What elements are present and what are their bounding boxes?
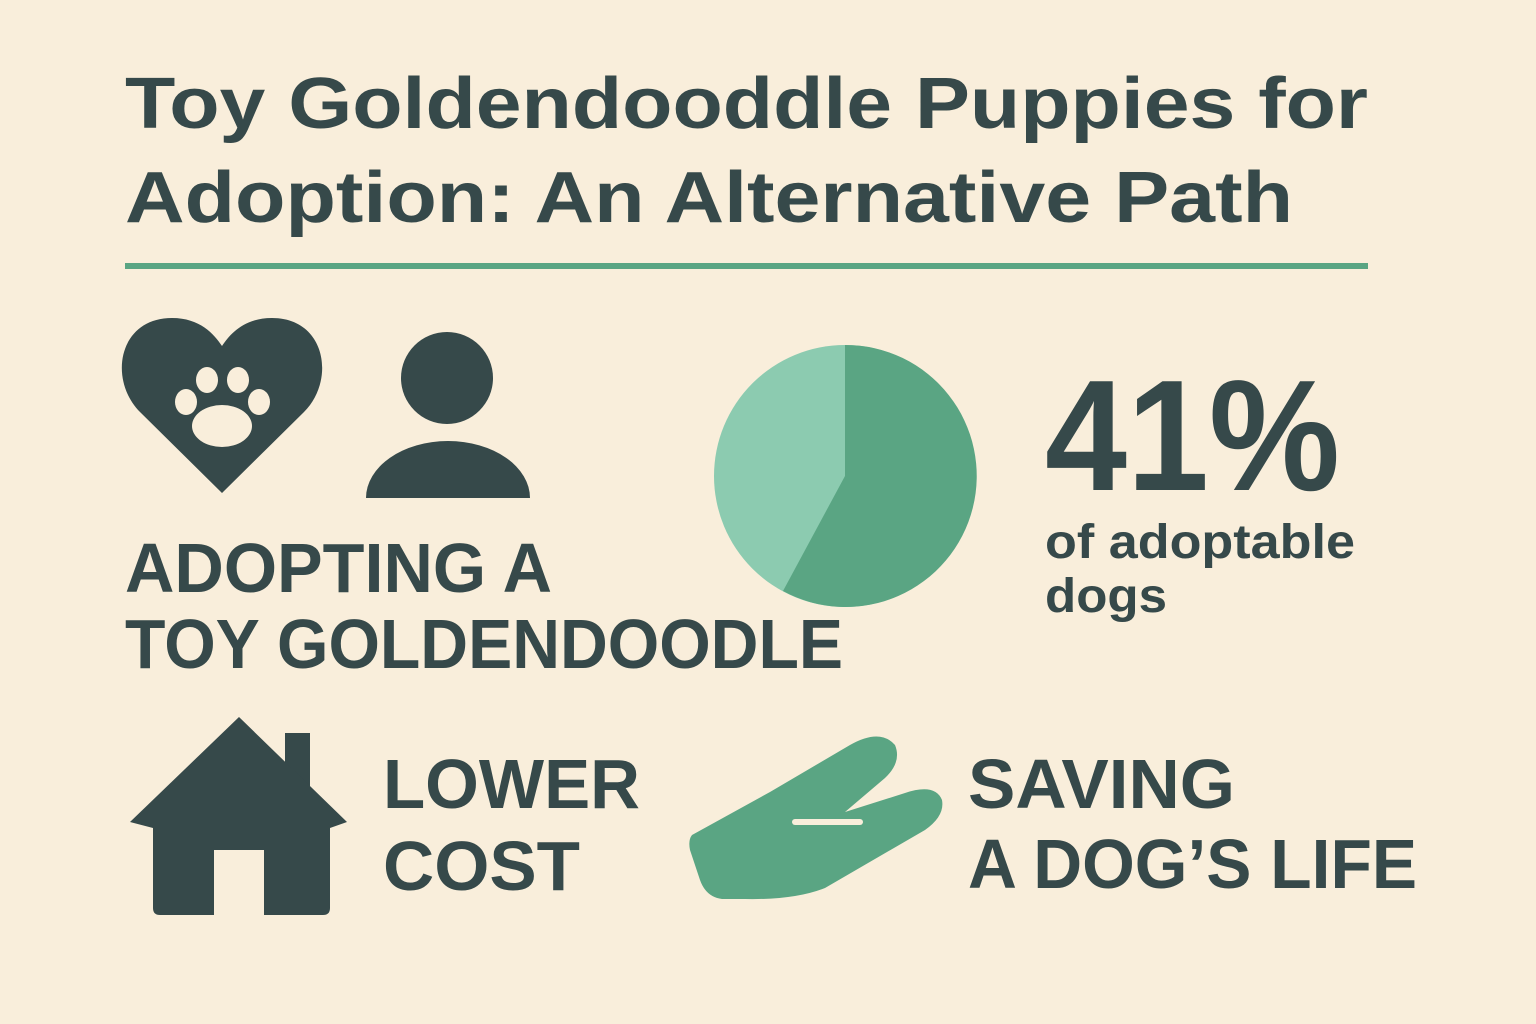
text: lower cost: LOWER (383, 745, 640, 823)
icon: heart with paw (122, 318, 322, 493)
icon: house (130, 717, 347, 915)
text: saving a dog's life: SAVING (968, 745, 1235, 823)
icon: person (366, 332, 530, 498)
heading: adopting (125, 529, 843, 683)
title: Toy Goldendooddle Puppies for (125, 64, 1368, 144)
icon: hand (689, 736, 942, 899)
heading: adopting: ADOPTING A (125, 529, 552, 607)
text: lower cost: COST (383, 827, 580, 905)
stat: 41%: dogs (1045, 570, 1167, 623)
stat: 41% (1045, 348, 1355, 623)
title: Adoption: An Alternative Path (125, 158, 1293, 238)
heading: adopting: TOY GOLDENDOODLE (125, 605, 843, 683)
title (125, 64, 1368, 238)
text: saving a dog's life: A DOG’S LIFE (968, 825, 1417, 903)
stat: 41%: 41% (1045, 348, 1340, 524)
text: lower cost (383, 745, 640, 905)
stat: 41%: of adoptable (1045, 516, 1355, 569)
text: saving a dog's life (968, 745, 1417, 903)
pie chart (714, 345, 977, 607)
